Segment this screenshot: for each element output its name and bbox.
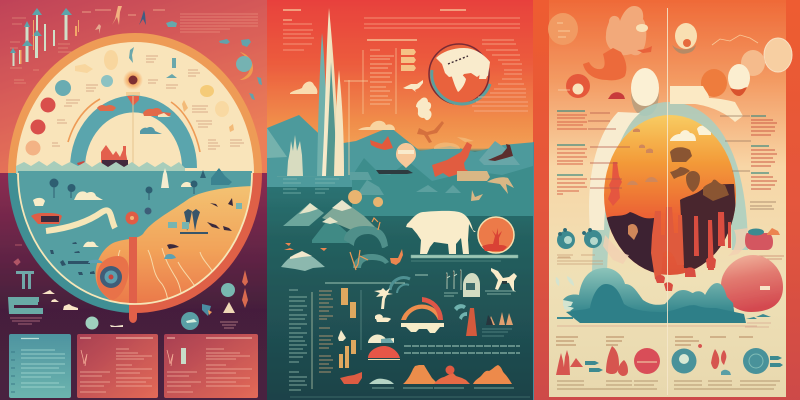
arch clouds — [97, 96, 171, 168]
small circles — [126, 212, 138, 224]
icons beneath circle, right — [181, 270, 248, 330]
left text below towers — [283, 179, 339, 193]
icons beneath circle, left — [8, 245, 123, 330]
figures row — [454, 304, 513, 336]
text columns with rules — [363, 48, 396, 114]
long caption — [404, 346, 520, 353]
distant mountains — [267, 115, 535, 187]
centre panel background — [267, 0, 533, 400]
teal icons left — [557, 228, 603, 264]
balloon — [376, 143, 416, 174]
left panel lower background — [0, 173, 267, 400]
red dome — [368, 335, 400, 360]
panel: left circular landscape poster — [0, 0, 267, 400]
half-ring gauge — [401, 297, 444, 333]
planet ball — [604, 115, 736, 275]
main circle cream sky — [16, 42, 254, 173]
bottom icons right group — [672, 344, 783, 375]
chart: rising arrows — [10, 8, 79, 83]
text block: top right — [180, 14, 258, 32]
right small icons row — [444, 268, 517, 297]
text block left upper — [557, 111, 630, 194]
sky text blocks — [283, 10, 520, 50]
dark right basin — [680, 184, 738, 270]
left panel upper background — [0, 0, 267, 173]
domes — [627, 128, 658, 240]
balloon shadow layer and small peaks — [277, 172, 461, 195]
teal wave clouds — [556, 268, 771, 323]
cloud left of tower — [290, 81, 317, 94]
planet surface details — [606, 126, 738, 274]
main circle outer ring lower left — [8, 173, 135, 313]
stream lines — [118, 248, 212, 298]
text block right upper — [720, 116, 777, 209]
blob label — [760, 286, 770, 290]
orange arcs — [68, 99, 200, 152]
red towers left — [608, 162, 622, 206]
pale splash around planet — [603, 228, 748, 264]
zigzag hills — [16, 161, 185, 174]
sphere cluster top — [548, 6, 652, 80]
teal edge strip — [533, 142, 534, 400]
text snippets in sky — [52, 56, 244, 149]
main circle outer ring top — [8, 33, 262, 173]
mountain group — [281, 200, 380, 271]
sun discs — [348, 190, 383, 207]
cream ring on the left — [589, 112, 640, 230]
cloud shelf right — [670, 86, 743, 122]
left circular icon and saucer — [558, 68, 700, 116]
arches with shrubs — [284, 218, 403, 270]
top small figures — [82, 6, 177, 34]
trees and clouds — [33, 182, 195, 247]
large white bull — [406, 211, 476, 254]
dark left basin — [606, 212, 657, 274]
castle on island — [77, 145, 128, 167]
central vertical rule — [666, 8, 668, 395]
planet faces top right — [672, 23, 792, 97]
tall towers — [317, 8, 368, 176]
large red blob — [721, 255, 783, 312]
right text lines around globe — [472, 40, 528, 111]
ground line under bull — [411, 255, 518, 261]
bottom captions — [557, 381, 780, 389]
card: teal info — [9, 334, 71, 398]
sun emblem — [124, 70, 142, 96]
right panel inner sheet — [549, 0, 786, 397]
left mountain facet — [267, 128, 287, 158]
red dinosaur — [432, 142, 475, 177]
rainbow ring — [592, 102, 748, 280]
oasis — [180, 209, 208, 234]
cream ring — [18, 173, 252, 304]
small towers — [287, 135, 303, 176]
red animal — [370, 136, 393, 150]
scattered fish — [50, 242, 95, 275]
red tree disc — [478, 217, 514, 253]
left text columns with bar charts — [289, 288, 362, 390]
bottom icons left group — [556, 337, 753, 376]
main circle outer ring lower right — [135, 173, 262, 313]
heading and arcs — [325, 275, 428, 293]
panel: right planet poster — [533, 0, 800, 400]
right teal and red capsule — [745, 228, 784, 259]
card: orange info — [164, 334, 258, 398]
sea — [18, 171, 252, 300]
palm icon — [374, 288, 393, 322]
brown blots — [670, 147, 700, 192]
drip bulbs — [655, 212, 731, 291]
right panel outer frame — [533, 0, 800, 400]
cloud centre — [358, 121, 395, 130]
mountain bar charts — [369, 365, 514, 388]
teal triangle and antler — [479, 141, 520, 165]
bird icon — [403, 80, 423, 92]
bottom rule — [290, 396, 530, 398]
world globe — [429, 44, 490, 104]
panel: centre towers and animals poster — [267, 0, 535, 400]
pale drift clouds — [434, 137, 474, 149]
bottom pale rule texts — [557, 323, 771, 327]
sand shapes — [457, 171, 514, 201]
white cloud — [670, 126, 711, 141]
card: red info — [77, 334, 158, 398]
central stem — [129, 237, 137, 323]
icons: right floating shapes — [219, 39, 262, 100]
lens on the stem — [97, 256, 129, 300]
river — [46, 210, 115, 231]
flags — [401, 49, 416, 71]
lower landscape — [18, 168, 252, 303]
sky circles — [26, 47, 234, 156]
foreground hill layers — [352, 158, 533, 216]
desert land — [95, 186, 258, 310]
ship — [31, 213, 62, 224]
teal arch — [70, 95, 197, 168]
red drips — [651, 207, 684, 279]
cream cluster and branch — [416, 98, 444, 143]
